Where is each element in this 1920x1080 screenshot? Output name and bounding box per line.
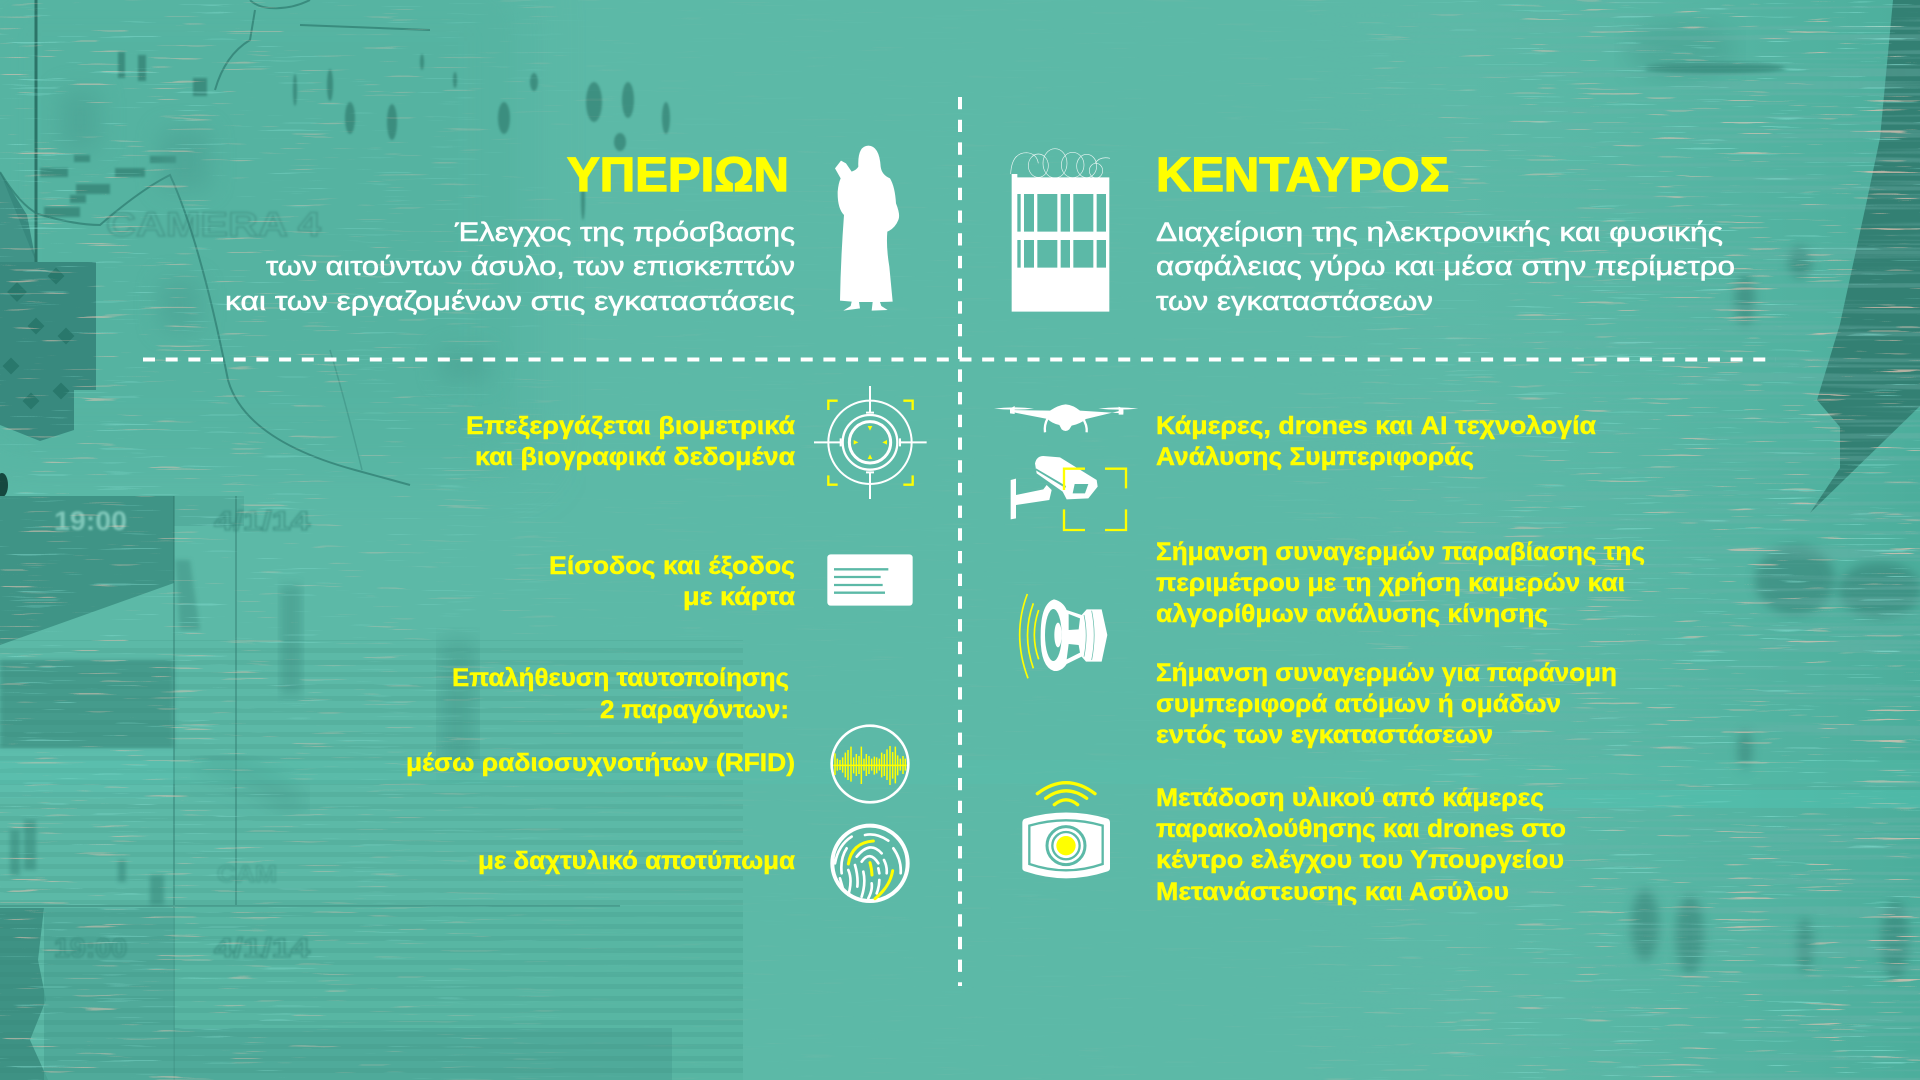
panel: ΥΠΕΡΙΩΝ [225, 146, 927, 901]
text block: Kentauros description: των εγκαταστάσεων [1156, 286, 1433, 316]
text block: two-factor authentication [452, 664, 789, 724]
text: fingerprint: με δαχτυλικό αποτύπωμα [478, 847, 796, 875]
text block: illegal behaviour alarms: εντός των εγκαταστάσεων [1156, 721, 1493, 749]
icon: eye with wireless signal [1022, 783, 1110, 878]
heading: ΚΕΝΤΑΥΡΟΣ: ΚΕΝΤΑΥΡΟΣ [1156, 149, 1449, 202]
text block: footage transmission: παρακολούθησης και drones στο [1156, 815, 1566, 843]
text block: illegal behaviour alarms: συμπεριφορά ατόμων ή ομάδων [1156, 690, 1561, 718]
text block: two-factor authentication: Επαλήθευση ταυτοποίησης [452, 664, 789, 692]
text block: perimeter alarms: αλγορίθμων ανάλυσης κίνησης [1156, 600, 1548, 628]
text block: Kentauros description: Διαχείριση της ηλεκτρονικής και φυσικής [1156, 217, 1723, 247]
text block: card entry: Είσοδος και έξοδος [549, 552, 795, 580]
background: teal surveillance-footage texture: 19:00 [54, 933, 127, 963]
text block: cameras and drones: Ανάλυσης Συμπεριφοράς [1156, 443, 1474, 471]
text block: footage transmission [1156, 784, 1566, 906]
icon: drone [994, 404, 1138, 432]
text block: biometric data: Επεξεργάζεται βιομετρικά [466, 412, 796, 440]
text block: Hyperion description [225, 217, 795, 316]
text: RFID: μέσω ραδιοσυχνοτήτων (RFID) [406, 749, 795, 777]
panel: ΚΕΝΤΑΥΡΟΣ [994, 149, 1735, 906]
text block: two-factor authentication: 2 παραγόντων: [600, 696, 789, 724]
text block: cameras and drones: Κάμερες, drones και AI τεχνολογία [1156, 412, 1597, 440]
icon: loudspeaker [1020, 594, 1107, 678]
background: teal surveillance-footage texture: CAM [217, 861, 277, 888]
text block: perimeter alarms [1156, 538, 1645, 628]
text block: Kentauros description [1156, 217, 1735, 316]
text block: footage transmission: Μετανάστευσης και Ασύλου [1156, 878, 1509, 906]
text block: perimeter alarms: περιμέτρου με τη χρήση καμερών και [1156, 569, 1625, 597]
text block: biometric data [466, 412, 796, 471]
icon: building with razor wire [1011, 149, 1110, 312]
background: teal surveillance-footage texture: 4/1/14 [214, 933, 310, 963]
background: teal surveillance-footage texture: CAMERA 4 [106, 206, 321, 244]
text block: footage transmission: Μετάδοση υλικού από κάμερες [1156, 784, 1544, 812]
icon: biometric target [814, 386, 927, 499]
heading: ΥΠΕΡΙΩΝ: ΥΠΕΡΙΩΝ [567, 149, 789, 202]
text block: footage transmission: κέντρο ελέγχου του Υπουργείου [1156, 846, 1564, 874]
text block: card entry [549, 552, 796, 611]
text block: biometric data: και βιογραφικά δεδομένα [475, 443, 796, 471]
icon: access card [827, 554, 913, 606]
text block: card entry: με κάρτα [683, 583, 796, 611]
icon: security camera in yellow frame [1011, 456, 1126, 530]
text block: Hyperion description: και των εργαζομένων στις εγκαταστάσεις [225, 286, 795, 316]
text block: cameras and drones [1156, 412, 1597, 471]
text block: illegal behaviour alarms: Σήμανση συναγερμών για παράνομη [1156, 659, 1617, 687]
icon: RFID waveform [832, 726, 908, 802]
horizontal dashed divider [143, 358, 1776, 362]
vertical dashed divider [958, 97, 962, 986]
background: teal surveillance-footage texture: 19:00 [54, 506, 127, 536]
text block: Kentauros description: ασφάλειας γύρω και μέσα στην περίμετρο [1156, 251, 1735, 281]
background: teal surveillance-footage texture: 4/1/14 [214, 506, 310, 536]
text block: perimeter alarms: Σήμανση συναγερμών παραβίασης της [1156, 538, 1645, 566]
icon: robed person silhouette [835, 146, 899, 311]
text block: Hyperion description: των αιτούντων άσυλο, των επισκεπτών [266, 251, 795, 281]
text block: Hyperion description: Έλεγχος της πρόσβασης [454, 217, 795, 247]
text block: illegal behaviour alarms [1156, 659, 1617, 749]
icon: fingerprint [832, 826, 908, 901]
